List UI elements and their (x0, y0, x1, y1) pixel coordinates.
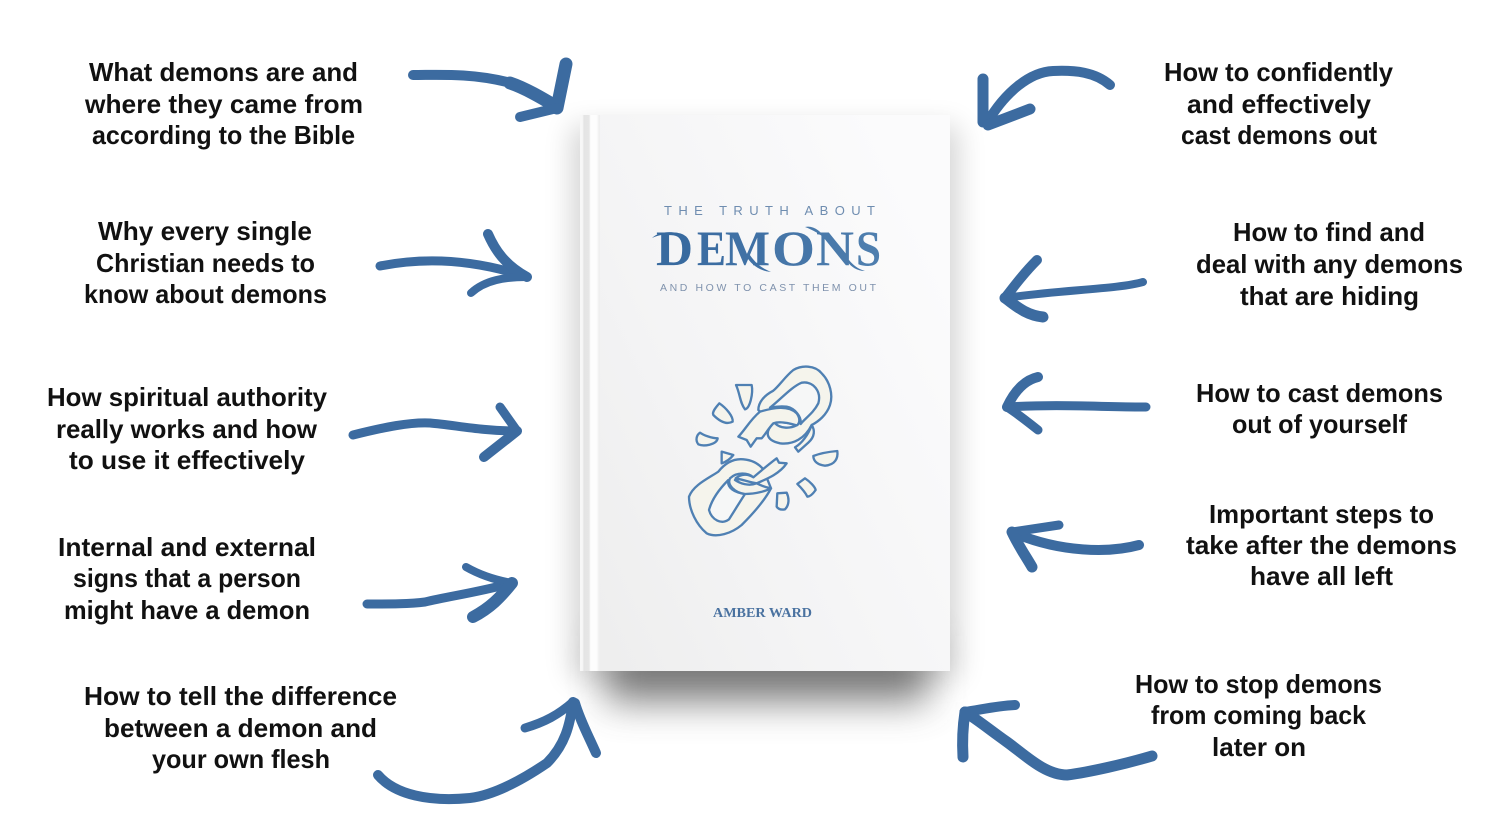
text: why every Christian: Christian needs to (96, 248, 315, 278)
text: signs: signs that a person (73, 563, 301, 593)
upper chain link (738, 367, 831, 452)
text: cast out confidently: cast demons out (1181, 120, 1377, 150)
book title: AND HOW TO CAST THEM OUT (660, 282, 877, 294)
text: spiritual authority: really works and how (56, 414, 318, 444)
text: stop coming back: later on (1212, 732, 1306, 762)
arrow 4 left (367, 567, 512, 617)
text: stop coming back (1135, 669, 1382, 762)
text: out of yourself (1196, 378, 1443, 439)
text: signs (58, 532, 316, 625)
text: why every Christian (84, 216, 327, 309)
book title: D (656, 220, 693, 276)
arrow 5 left (378, 702, 596, 799)
text: what demons are: where they came from (84, 89, 363, 119)
arrow 3 right (1007, 377, 1146, 430)
text: demon or flesh: your own flesh (152, 744, 330, 774)
text: cast out confidently: How to confidently (1164, 57, 1394, 87)
arrow 1 left (413, 64, 566, 117)
text: out of yourself: out of yourself (1232, 409, 1407, 439)
text: demon or flesh: between a demon and (104, 713, 377, 743)
lower chain link (689, 452, 787, 535)
text: spiritual authority (47, 382, 328, 475)
book title: E (697, 220, 726, 276)
text: hiding demons (1196, 217, 1463, 311)
text: why every Christian: know about demons (84, 279, 327, 309)
text: what demons are: according to the Bible (92, 120, 355, 150)
text: signs: might have a demon (64, 595, 310, 625)
text: why every Christian: Why every single (98, 216, 312, 246)
book title: N (816, 220, 854, 276)
arrow 4 right (1012, 525, 1139, 567)
book title: S (856, 220, 881, 276)
book author: AMBER WARD (713, 606, 812, 621)
text: spiritual authority: to use it effectively (69, 445, 306, 475)
text: hiding demons: deal with any demons (1196, 249, 1463, 279)
book cover (580, 115, 950, 671)
text: hiding demons: that are hiding (1240, 281, 1419, 311)
text: hiding demons: How to find and (1233, 217, 1425, 247)
text: cast out confidently: and effectively (1187, 89, 1372, 119)
text: cast out confidently (1164, 57, 1394, 150)
text: out of yourself: How to cast demons (1196, 378, 1443, 408)
icon: broken chain (689, 367, 837, 535)
arrow 5 right (963, 705, 1152, 775)
arrow 1 right (983, 71, 1110, 125)
arrow 2 right (1005, 260, 1143, 317)
text: what demons are: What demons are and (89, 57, 358, 87)
chain fragments (697, 385, 837, 510)
text: stop coming back: from coming back (1151, 700, 1367, 730)
arrow 3 left (353, 407, 517, 457)
book title: O (772, 220, 815, 276)
text: stop coming back: How to stop demons (1135, 669, 1382, 699)
book title: M (725, 220, 770, 276)
text: important steps: have all left (1250, 561, 1393, 591)
text: demon or flesh: How to tell the difference (84, 681, 397, 711)
text: spiritual authority: How spiritual authority (47, 382, 328, 412)
book (572, 115, 958, 702)
text: important steps: take after the demons (1186, 530, 1457, 560)
book title: THE TRUTH ABOUT (664, 203, 875, 218)
text: what demons are (84, 57, 363, 150)
book title (652, 203, 881, 294)
text: demon or flesh (84, 681, 397, 774)
text: important steps: Important steps to (1209, 499, 1434, 529)
arrow 2 left (380, 234, 527, 293)
book shadow (572, 126, 958, 702)
text: important steps (1186, 499, 1457, 591)
text: signs: Internal and external (58, 532, 316, 562)
